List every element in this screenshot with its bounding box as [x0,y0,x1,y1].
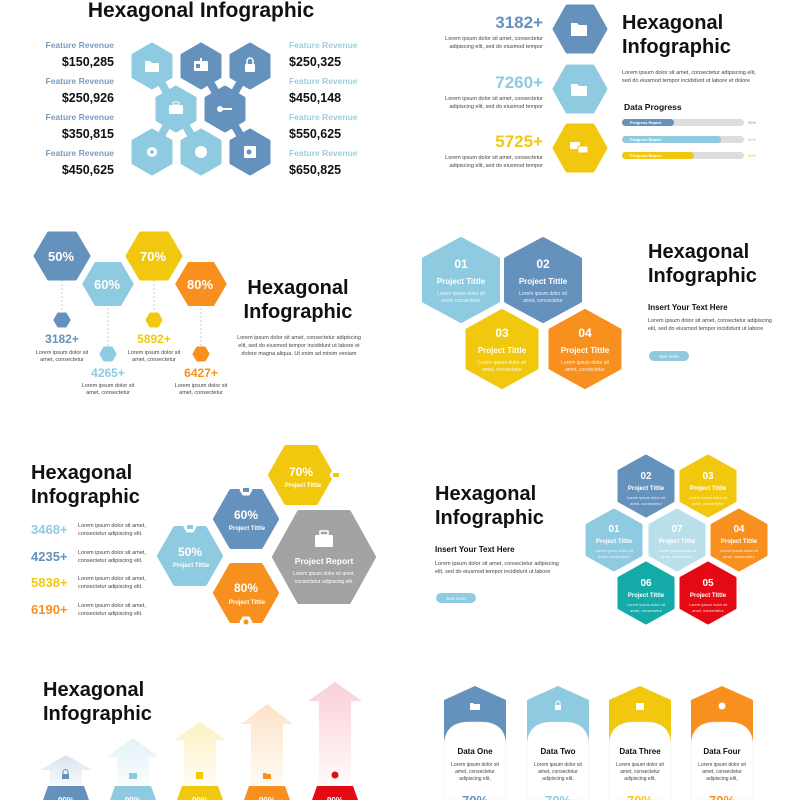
left revenue list: Feature Revenue [46,112,114,122]
panel: seven hexagon honeycomb: 04 [733,524,745,535]
left revenue list: Feature Revenue [46,76,114,86]
panel: four project hexagons: 03 [495,326,509,340]
panel: percentage hexagons: Lorem ipsum dolor sit [128,350,181,356]
honeycomb [587,456,766,623]
right revenue list: $550,625 [289,127,341,141]
description: dolore magna aliqua. Ut enim ad minim veniam [242,351,357,357]
panel: four project hexagons: Infographic [648,265,757,287]
stat list [31,522,68,617]
left revenue list: Feature Revenue [46,148,114,158]
panel: four project hexagons: 01 [454,257,468,271]
panel: four project hexagons: 02 [536,257,550,271]
title: Hexagonal [435,483,536,505]
panel: project report cluster: 80% [234,581,258,595]
panel: seven hexagon honeycomb: 01 [608,524,620,535]
panel: project report cluster: consectetur adipiscing elit. [78,558,143,564]
panel: percentage hexagons: Infographic [244,301,352,323]
title: Hexagonal [43,679,144,701]
panel: seven hexagon honeycomb: 05 [702,578,714,589]
panel: data cards: Lorem ipsum dolor sit [451,762,500,768]
progress bars: 80% [748,137,756,142]
dotted connectors [62,280,201,346]
panel: four project hexagons: Lorem ipsum dolor sit [561,360,610,366]
panel: seven hexagon honeycomb: Project Tittle [690,593,727,599]
title: Hexagonal [622,12,723,34]
panel: data cards: amet, consectetur [702,769,742,775]
hex cluster [159,447,374,627]
panel: percentage hexagons [35,233,361,396]
left revenue list: Feature Revenue [46,40,114,50]
panel: project report cluster: consectetur adipiscing elit. [295,579,353,585]
panel: project report cluster: Project Tittle [285,483,322,489]
panel: four project hexagons: Insert Your Text Here [648,303,728,312]
panel: seven hexagon honeycomb: Lorem ipsum dolor sit [627,495,666,500]
panel: data cards: Data Four [703,747,741,756]
panel: project report cluster: Lorem ipsum dolor sit amet, [293,571,355,577]
panel: four project hexagons: Project Tittle [561,346,610,355]
stat descriptions: adipiscing elit, sed do eiusmod tempor [449,104,543,110]
stat descriptions [445,36,543,169]
right revenue list: Feature Revenue [289,112,358,122]
stat hexagons [554,6,606,171]
stat values: 5892+ [137,332,171,346]
panel: seven hexagon honeycomb: Project Tittle [628,593,665,599]
panel: seven hexagon honeycomb [435,456,766,623]
panel: growth arrows: Infographic [43,703,152,725]
panel: seven hexagon honeycomb: Lorem ipsum dolor sit [720,548,759,553]
panel: percentage hexagons: Lorem ipsum dolor sit [175,383,228,389]
progress bars: 50% [748,153,756,158]
panel: data cards: amet, consectetur [538,769,578,775]
panel: four project hexagons: amet, consectetur [441,298,481,304]
panel: seven hexagon honeycomb: Lorem ipsum dolor sit [689,495,728,500]
description: Lorem ipsum dolor sit amet, consectetur adipiscing [237,335,361,341]
stat descriptions: Lorem ipsum dolor sit amet, consectetur [445,36,543,42]
panel: data cards: amet, consectetur [455,769,495,775]
panel: seven hexagon honeycomb: amet, consectetur [630,608,663,613]
panel: seven hexagon honeycomb: 03 [702,471,714,482]
panel: data cards: adipiscing elit, [542,776,574,782]
panel: seven hexagon honeycomb: Lorem ipsum dolor sit [658,548,697,553]
panel: project report cluster: Lorem ipsum dolor sit amet, [78,523,146,529]
panel: four project hexagons: Project Tittle [478,346,527,355]
panel: four project hexagons: amet, consectetur [523,298,563,304]
stat values: 3182+ [45,332,79,346]
panel: seven hexagon honeycomb: 02 [640,471,652,482]
panel: data cards: Lorem ipsum dolor sit [698,762,747,768]
panel: percentage hexagons: Lorem ipsum dolor sit [82,383,135,389]
panel: project report cluster [31,447,374,627]
panel: data cards: Data One [457,747,493,756]
panel: project report cluster: Lorem ipsum dolor sit amet, [78,603,146,609]
panel: data cards [444,686,753,800]
panel: four project hexagons: Lorem ipsum dolor sit [478,360,527,366]
panel: seven hexagon honeycomb: amet, consectetur [692,501,725,506]
panel: project report cluster: Infographic [31,486,140,508]
stat numbers: 3182+ [495,13,543,32]
panel: seven hexagon honeycomb: amet, consectetur [598,554,631,559]
stat descriptions: Lorem ipsum dolor sit amet, consectetur [445,96,543,102]
panel: project report cluster: 50% [178,545,202,559]
panel: percentage hexagons: 50% [48,249,74,264]
panel: seven hexagon honeycomb: Project Tittle [596,539,633,545]
panel: project report cluster: Project Tittle [229,526,266,532]
description: Lorem ipsum dolor sit amet, consectetur adipiscing elit, [622,70,756,76]
panel: four project hexagons: Project Tittle [437,277,486,286]
panel: seven hexagon honeycomb: Lorem ipsum dolor sit [627,602,666,607]
panel: percentage hexagons: amet, consectetur [86,390,130,396]
panel: data cards: Lorem ipsum dolor sit [616,762,665,768]
panel: four project hexagons: Lorem ipsum dolor sit [519,291,568,297]
panel: seven hexagon honeycomb: Project Tittle [659,539,696,545]
button [436,593,476,603]
left revenue list: $250,926 [62,91,114,105]
stat descriptions: adipiscing elit, sed do eiusmod tempor [449,44,543,50]
panel: seven hexagon honeycomb: Project Tittle [690,486,727,492]
right revenue list [289,40,358,177]
panel: project report cluster: Project Tittle [229,600,266,606]
panel: data cards: amet, consectetur [620,769,660,775]
panel: project report cluster: Project Tittle [173,563,210,569]
panel: seven hexagon honeycomb: amet, consectetur [723,554,756,559]
arrows [40,682,362,800]
panel: data cards: Data Two [541,747,576,756]
panel: four project hexagons: Project Tittle [519,277,568,286]
panel: four project hexagons: elit, sed do eiusmod tempor incididunt ut labore [648,326,763,332]
progress bars: Data Progress [624,102,682,112]
panel: project report cluster: consectetur adipiscing elit. [78,531,143,537]
hex network [133,44,269,174]
panel: seven hexagon honeycomb: Project Tittle [628,486,665,492]
panel: four project hexagons: 04 [578,326,592,340]
panel: project report cluster: Project Report [295,556,353,566]
panel: percentage hexagons: 60% [94,277,120,292]
panel: four project hexagons [424,239,772,391]
stat numbers: 7260+ [495,73,543,92]
panel: seven hexagon honeycomb: Lorem ipsum dolor sit [595,548,634,553]
panel: seven hexagon honeycomb: amet, consectetur [692,608,725,613]
panel: project report cluster: 60% [234,508,258,522]
left revenue list: $450,625 [62,163,114,177]
stat list: 3468+ [31,522,68,537]
panel: project report cluster: 70% [289,465,313,479]
panel: data cards: adipiscing elit, [459,776,491,782]
stat descriptions: adipiscing elit, sed do eiusmod tempor [449,163,543,169]
stat descriptions: Lorem ipsum dolor sit amet, consectetur [445,155,543,161]
panel: seven hexagon honeycomb: Lorem ipsum dolor sit [689,602,728,607]
panel: seven hexagon honeycomb: amet, consectetur [661,554,694,559]
panel: four project hexagons: amet, consectetur [482,367,522,373]
panel: percentage hexagons: Lorem ipsum dolor sit [36,350,89,356]
right revenue list: $250,325 [289,55,341,69]
stat list: 6190+ [31,602,68,617]
left revenue list: $350,815 [62,127,114,141]
panel: data cards: Lorem ipsum dolor sit [534,762,583,768]
panel: four project hexagons: Lorem ipsum dolor sit [437,291,486,297]
panel: stats with progress: Infographic [622,36,731,58]
panel: project report cluster: Lorem ipsum dolor sit amet, [78,576,146,582]
button: See more [659,354,679,359]
panel: project report cluster: consectetur adipiscing elit. [78,611,143,617]
panel: stats with progress: sed do eiusmod tempor incididunt ut labore et dolore [622,78,750,84]
panel: stats with progress [445,6,756,171]
panel: growth arrows [40,679,362,800]
panel: seven hexagon honeycomb: Project Tittle [721,539,758,545]
panel: project report cluster: Lorem ipsum dolor sit amet, [78,550,146,556]
panel: data cards: adipiscing elit, [706,776,738,782]
right revenue list: Feature Revenue [289,76,358,86]
panel: seven hexagon honeycomb: Insert Your Text Here [435,545,515,554]
panel: seven hexagon honeycomb: elit, sed do eiusmod tempor incididunt ut labore [435,569,550,575]
progress bars: Progress Report [630,120,662,125]
right revenue list: Feature Revenue [289,40,358,50]
panel: revenue hex network [46,0,358,177]
panel: percentage hexagons: amet, consectetur [132,357,176,363]
title: Hexagonal [648,241,749,263]
stat list: 5838+ [31,575,68,590]
panel: percentage hexagons: amet, consectetur [179,390,223,396]
progress bars: Progress Report [630,137,662,142]
panel: percentage hexagons: 70% [140,249,166,264]
panel: project report cluster: consectetur adipiscing elit. [78,584,143,590]
panel: four project hexagons: amet, consectetur [565,367,605,373]
button [649,351,689,361]
button: See more [446,596,466,601]
stat numbers [495,13,543,151]
stat values: 6427+ [184,366,218,380]
stat values: 4265+ [91,366,125,380]
panel: four project hexagons: Lorem ipsum dolor sit amet, consectetur adipiscing [648,318,772,324]
stat values [45,332,218,380]
panel: seven hexagon honeycomb: Infographic [435,507,544,529]
progress bars: Progress Report [630,153,662,158]
description: elit, sed do eiusmod tempor incididunt ut labore et [238,343,360,349]
title: Hexagonal [247,277,349,299]
panel: seven hexagon honeycomb: Lorem ipsum dolor sit amet, consectetur adipiscing [435,561,559,567]
panel: percentage hexagons: 80% [187,277,213,292]
panel: percentage hexagons: amet, consectetur [40,357,84,363]
panel: seven hexagon honeycomb: 06 [640,578,652,589]
title: Hexagonal [31,462,132,484]
right revenue list: $450,148 [289,91,341,105]
stat list: 4235+ [31,549,68,564]
right revenue list: $650,825 [289,163,341,177]
panel: seven hexagon honeycomb: amet, consectetur [630,501,663,506]
percent hexagons [35,233,228,360]
progress bars [622,102,756,159]
right revenue list: Feature Revenue [289,148,358,158]
description [237,335,361,357]
progress bars: 35% [748,120,756,125]
panel: seven hexagon honeycomb: 07 [671,524,683,535]
left revenue list [46,40,114,177]
icons [145,58,256,158]
stat numbers: 5725+ [495,132,543,151]
panel: data cards: Data Three [619,747,661,756]
left revenue list: $150,285 [62,55,114,69]
panel: data cards: adipiscing elit, [624,776,656,782]
